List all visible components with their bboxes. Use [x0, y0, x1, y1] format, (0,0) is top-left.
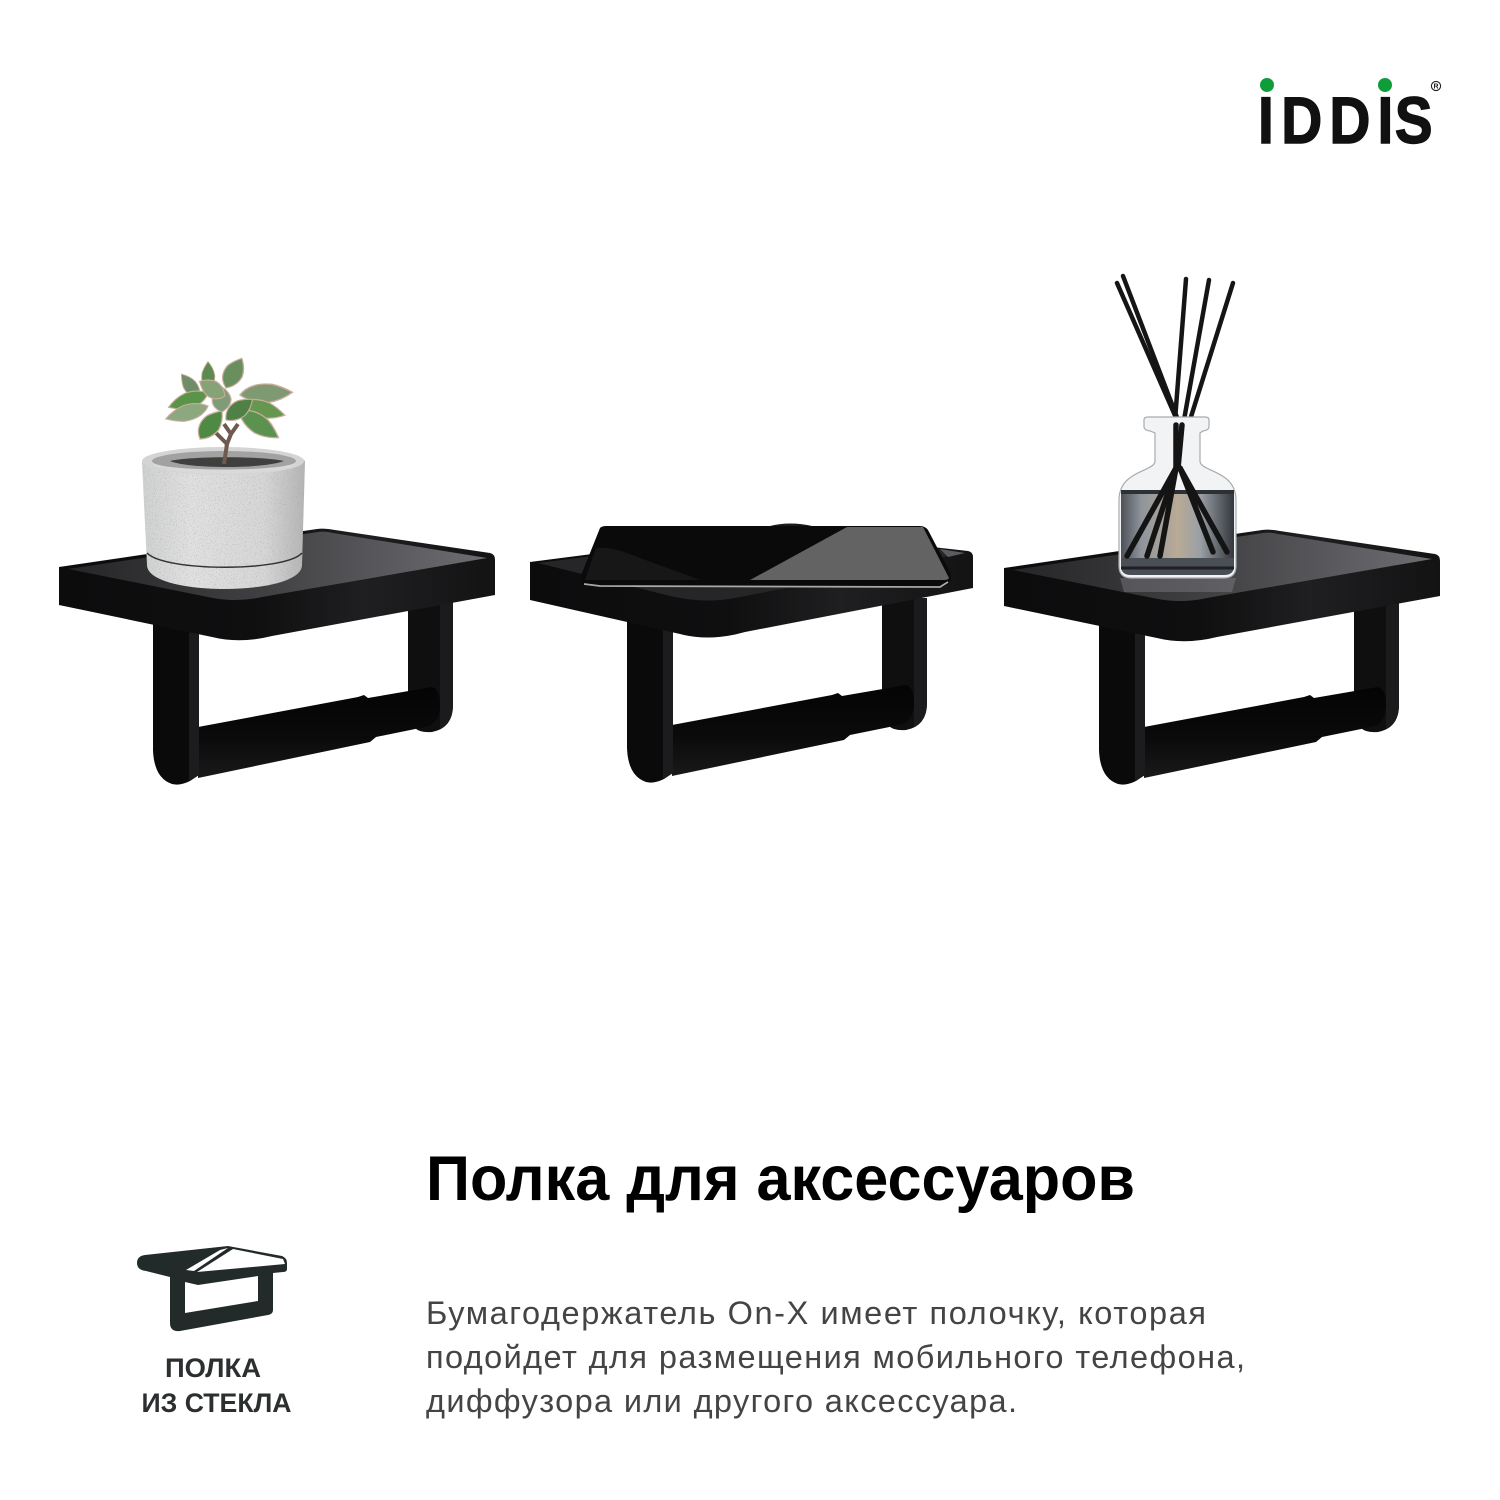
holder 3 with diffuser — [1004, 276, 1440, 785]
holder 3 posts and roller — [1099, 600, 1399, 785]
diffuser bottle — [1119, 417, 1236, 578]
holder 3 shelf — [1004, 530, 1440, 641]
icon: glass shelf — [137, 1246, 287, 1331]
concrete pot — [140, 444, 308, 595]
holder 1 posts and roller — [153, 600, 453, 785]
sticks inside bottle — [1127, 425, 1227, 556]
logo: IDDIS: IDDIS — [1258, 84, 1433, 158]
description text: Бумагодержатель On-X имеет полочку, которая — [426, 1295, 1206, 1331]
registered mark — [1431, 81, 1441, 91]
description text: подойдет для размещения мобильного телефона, — [426, 1339, 1245, 1375]
heading: Полка для аксессуаров — [426, 1144, 1135, 1214]
holder 2 posts and roller — [627, 598, 927, 783]
smartphone — [580, 524, 951, 588]
icon caption: ПОЛКА — [165, 1353, 261, 1383]
holder 1 shelf — [59, 529, 495, 640]
description text: диффузора или другого аксессуара. — [426, 1383, 1017, 1419]
holder 1 with plant — [59, 354, 495, 785]
holder 2 with phone — [530, 524, 973, 783]
logo dot right — [1378, 78, 1392, 92]
description text — [426, 1295, 1245, 1419]
holder 2 shelf — [530, 530, 973, 638]
icon caption — [142, 1353, 292, 1418]
icon caption: ИЗ СТЕКЛА — [142, 1388, 292, 1418]
diffuser sticks — [1117, 276, 1233, 420]
plant — [164, 354, 293, 462]
registered mark: R — [1433, 84, 1439, 91]
logo dot left — [1260, 78, 1274, 92]
